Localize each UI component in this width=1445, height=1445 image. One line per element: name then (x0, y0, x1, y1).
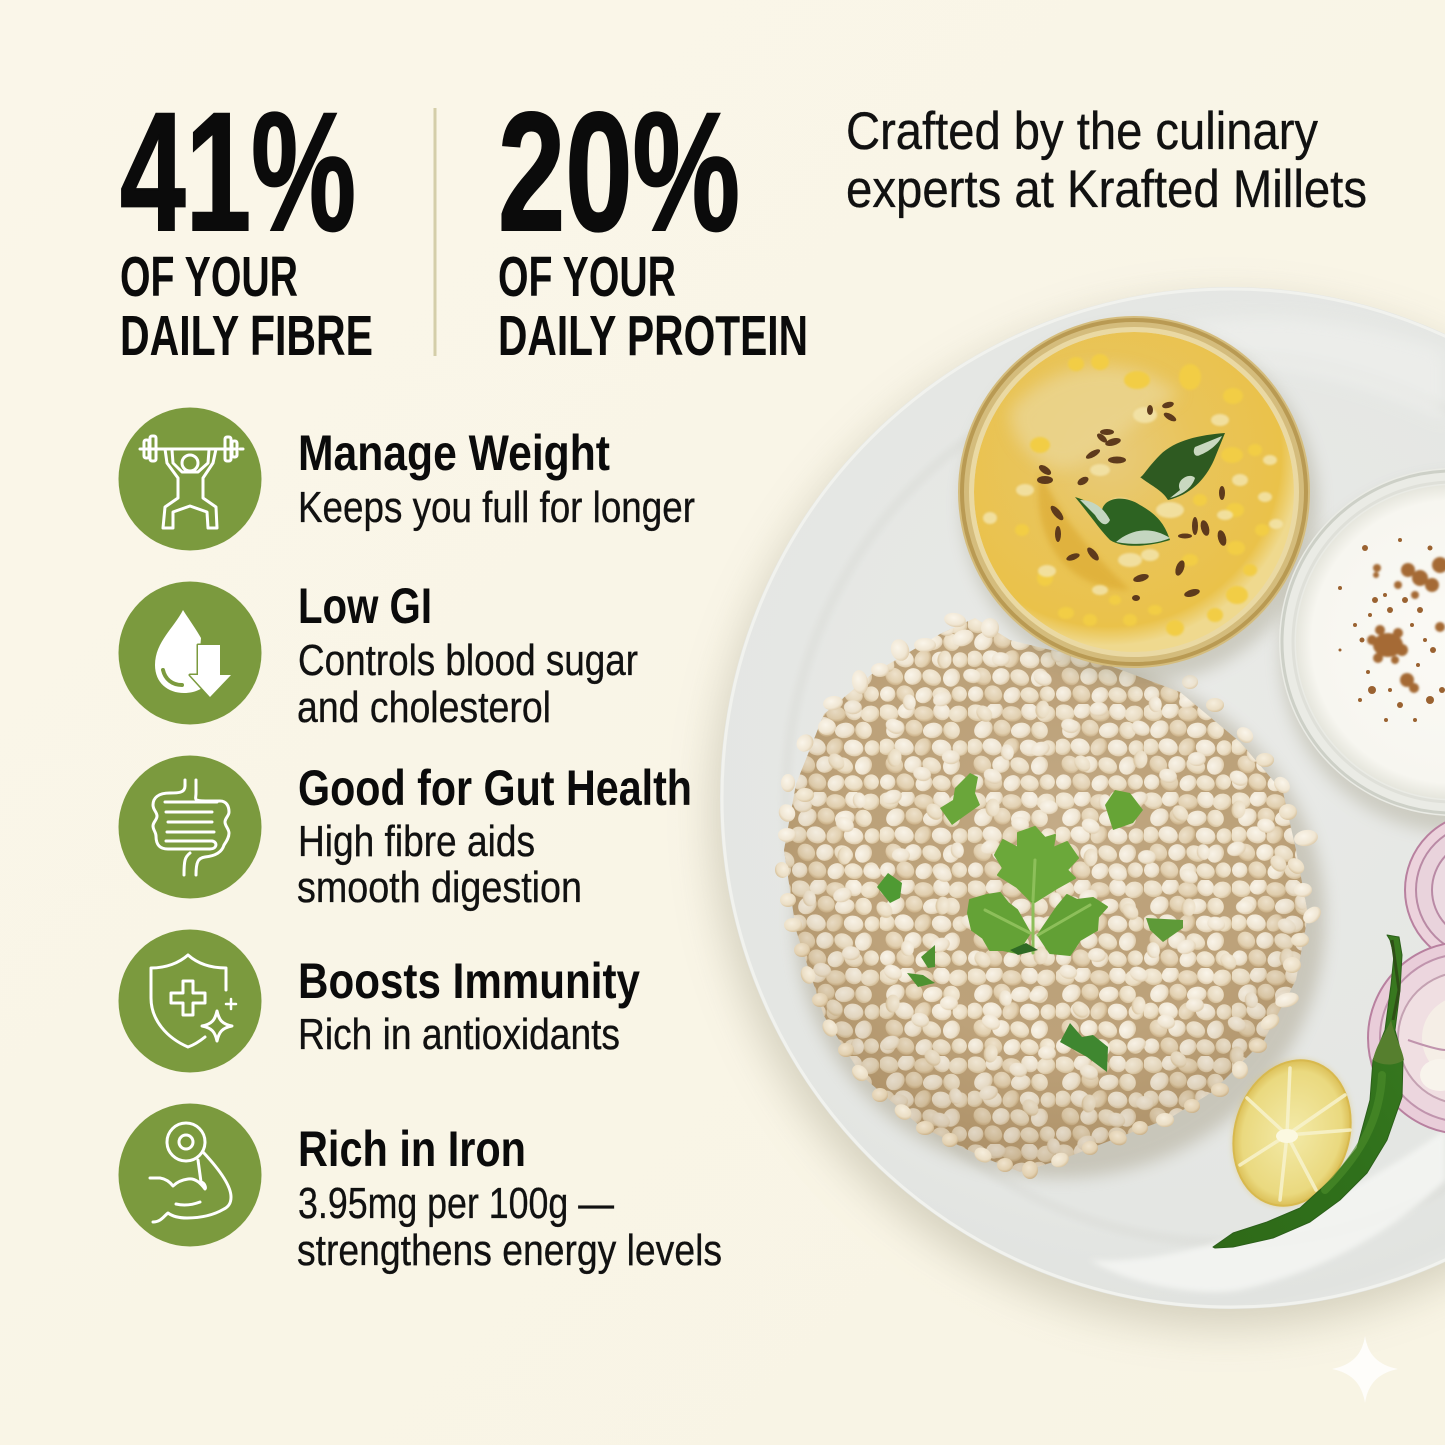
benefit: immunity (118, 930, 640, 1072)
description: smooth digestion (297, 863, 582, 912)
benefit: manage weight (118, 408, 695, 550)
cumin seeds (1037, 401, 1228, 601)
stat: 20% daily protein: 20% (498, 77, 740, 266)
cilantro garnish (877, 773, 1183, 1072)
green chilli (1213, 935, 1404, 1248)
tagline: experts at Krafted Millets (846, 160, 1367, 219)
description (297, 817, 582, 912)
description: Controls blood sugar (298, 636, 638, 685)
heading: Low GI (298, 578, 432, 634)
description: and cholesterol (297, 683, 551, 732)
stat: 41% daily fibre: OF YOUR (120, 245, 298, 309)
description: High fibre aids (298, 817, 535, 866)
heading: Rich in Iron (298, 1121, 526, 1177)
tagline (846, 102, 1367, 219)
lemon wedge (1215, 1044, 1369, 1222)
icon: weightlifter (118, 408, 262, 550)
heading: Manage Weight (298, 425, 610, 481)
description: strengthens energy levels (297, 1226, 722, 1275)
stat: 20% daily protein: OF YOUR (498, 245, 676, 309)
tagline: Crafted by the culinary (846, 102, 1318, 161)
stat: 41% daily fibre: DAILY FIBRE (120, 304, 373, 368)
millet rice (760, 600, 1330, 1190)
benefit: iron (118, 1104, 722, 1275)
stat: 20% daily protein: DAILY PROTEIN (498, 304, 808, 368)
icon: intestines (118, 756, 262, 898)
description: Rich in antioxidants (298, 1010, 620, 1059)
benefit: gut health (118, 756, 692, 912)
bowl: dal (958, 316, 1318, 683)
stat: 41% daily fibre: 41% (120, 77, 356, 266)
bowl: raita (1279, 468, 1445, 833)
heading: Boosts Immunity (298, 953, 640, 1009)
plate (720, 287, 1445, 1309)
description (297, 636, 638, 732)
description: 3.95mg per 100g — (298, 1179, 614, 1228)
benefit: low GI (118, 578, 638, 732)
curry leaves (1075, 433, 1225, 546)
description (297, 1179, 722, 1275)
stat: 20% daily protein (498, 77, 808, 368)
icon: drop and down arrow (118, 582, 262, 724)
icon: shield with cross (118, 930, 262, 1072)
onion slices (1368, 813, 1445, 1134)
lentils (1015, 354, 1269, 636)
heading: Good for Gut Health (298, 760, 692, 816)
stat: 41% daily fibre (120, 77, 373, 368)
icon: arm with dumbbell (118, 1104, 262, 1246)
plate photo illustration (713, 287, 1445, 1327)
description: Keeps you full for longer (298, 483, 695, 532)
loose grains around the pile (774, 611, 1324, 1179)
watermark sparkle (1332, 1336, 1398, 1403)
cinnamon powder (1338, 538, 1445, 722)
